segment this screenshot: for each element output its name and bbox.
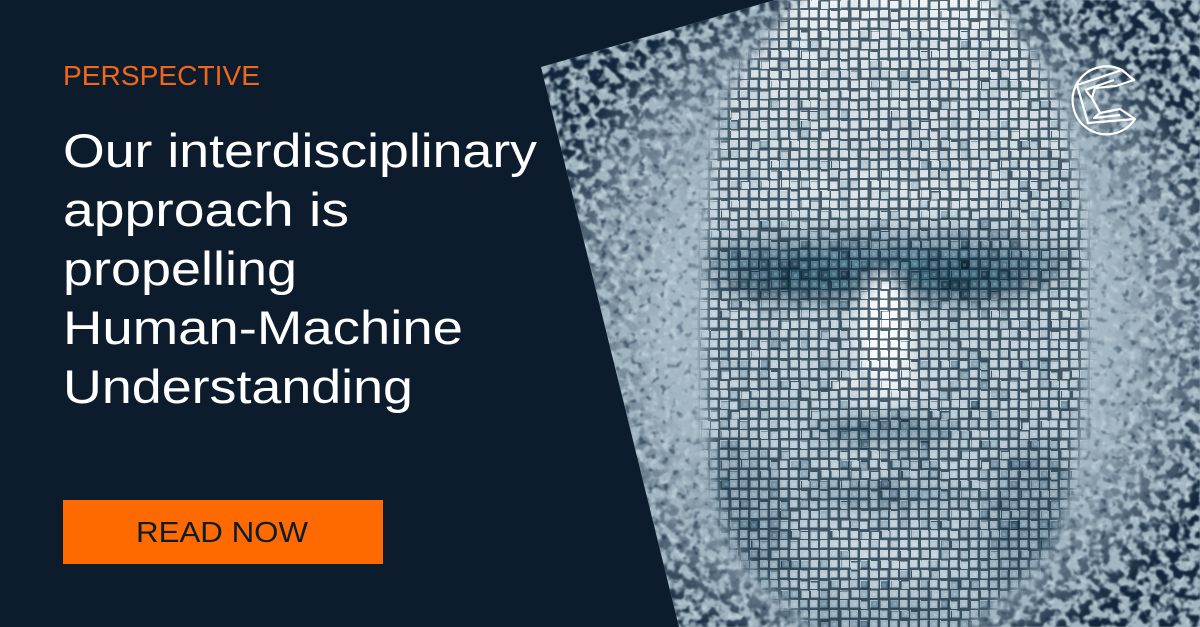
heading: Understanding bbox=[63, 360, 413, 413]
heading: Human-Machine bbox=[63, 301, 463, 354]
panel: tilted face image bbox=[540, 0, 1200, 627]
heading: Our interdisciplinary bbox=[63, 124, 538, 177]
face base tone bbox=[696, 0, 1094, 627]
block tone variation bbox=[690, 0, 1100, 627]
speckle field light bbox=[540, 0, 1200, 627]
heading: approach is bbox=[63, 183, 349, 236]
speckle field dense dark edges bbox=[540, 0, 1200, 627]
icon: company logo bbox=[1073, 66, 1135, 134]
heading bbox=[63, 124, 538, 413]
speckle field sparse bbox=[540, 0, 1200, 627]
face shading bbox=[685, 168, 1085, 627]
halo around head bbox=[690, 40, 1100, 620]
image base mist bbox=[540, 0, 1200, 627]
heading: propelling bbox=[63, 242, 297, 295]
button: read now bbox=[63, 500, 383, 564]
pixel face bbox=[694, 0, 1096, 627]
label: perspective: PERSPECTIVE bbox=[63, 60, 260, 91]
button: read now: READ NOW bbox=[136, 517, 309, 549]
cube grid bbox=[690, 0, 1100, 627]
